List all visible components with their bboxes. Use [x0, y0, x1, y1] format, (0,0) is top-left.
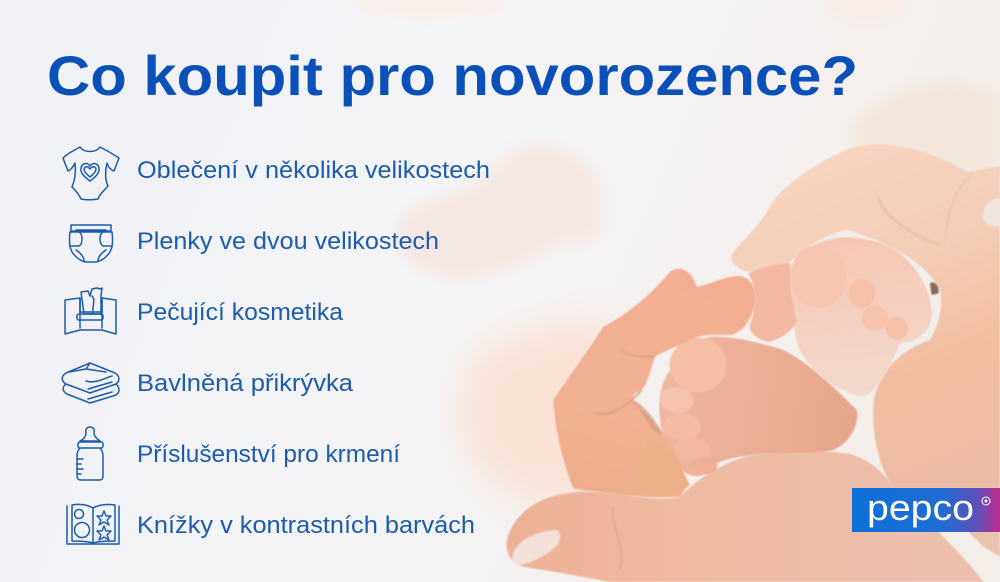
palm fold of left hand	[631, 439, 690, 495]
text: Oblečení v několika velikostech	[137, 157, 490, 184]
left hand	[553, 269, 755, 497]
blurred baby leg	[460, 324, 630, 500]
item: diapers	[70, 225, 439, 262]
text: Pečující kosmetika	[137, 299, 344, 326]
item: books	[67, 504, 475, 544]
item: feeding	[77, 427, 400, 480]
icon: wet wipes	[65, 288, 116, 334]
text: Bavlněná přikrývka	[137, 370, 354, 397]
forearm at lower right	[967, 530, 1000, 557]
item: cosmetics	[65, 288, 344, 334]
middle finger	[748, 263, 797, 342]
list of items	[62, 147, 490, 544]
photo: baby feet held in parents' hands	[350, 0, 1000, 582]
title: Co koupit pro novorozence?	[47, 44, 858, 107]
text: Knížky v kontrastních barvách	[137, 512, 475, 539]
icon: folded blanket	[62, 363, 119, 403]
text: Příslušenství pro krmení	[137, 441, 400, 468]
icon: baby bottle	[77, 427, 103, 480]
text: Plenky ve dvou velikostech	[137, 228, 439, 255]
icon: book	[67, 504, 119, 544]
icon: baby bodysuit	[63, 147, 119, 200]
blurred top shapes	[350, 0, 1000, 180]
right baby foot	[790, 237, 932, 397]
item: clothes	[63, 147, 490, 200]
logo: pepco	[852, 487, 1000, 532]
logo: pepco: pepco	[867, 487, 974, 528]
lower hand	[507, 451, 983, 582]
icon: diaper	[70, 225, 112, 262]
item: blanket	[62, 363, 354, 403]
left baby foot	[657, 337, 857, 476]
blurred baby hand	[397, 144, 603, 279]
upper and right hand	[731, 144, 1000, 488]
